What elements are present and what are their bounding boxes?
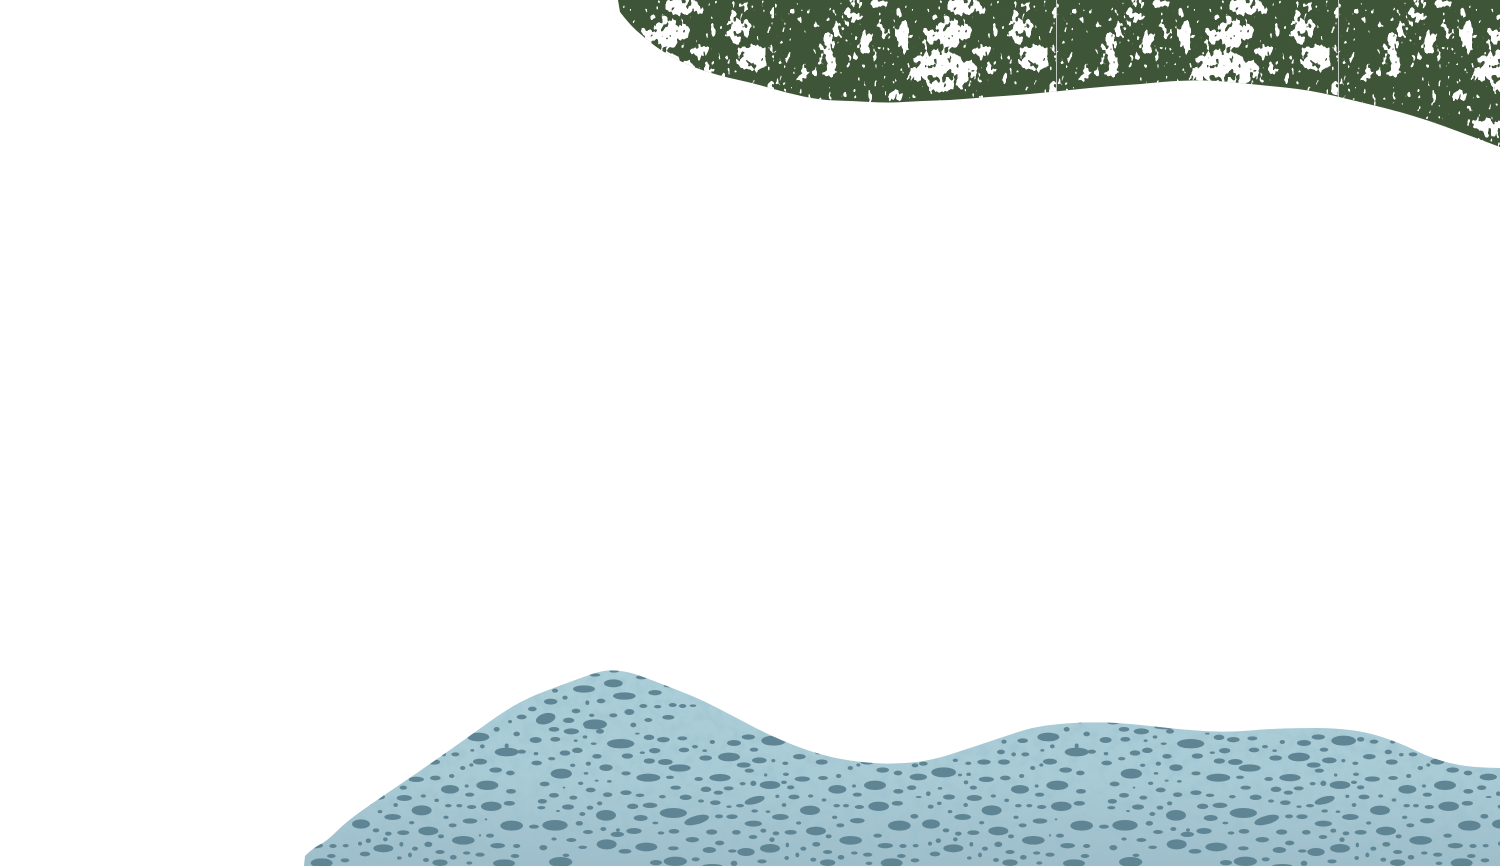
panel: dark green textured wave at top right (618, 0, 1500, 147)
panel: light blue speckled hills at bottom right (300, 666, 1500, 866)
dark blue speckles (300, 666, 1500, 866)
blue hills base fill (300, 666, 1500, 866)
mottled tone (372, 673, 1481, 804)
green wave base fill (618, 0, 1500, 150)
white mottled texture, repeated tile (623, 0, 1500, 146)
